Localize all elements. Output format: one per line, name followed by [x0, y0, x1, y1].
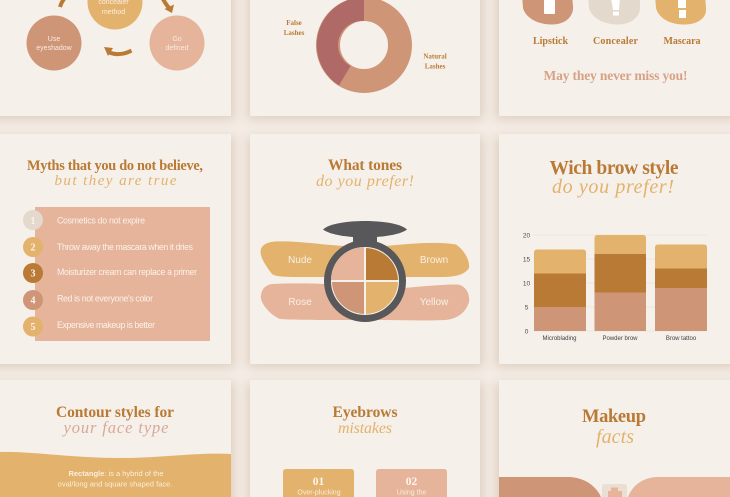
heading: What tones: [328, 157, 402, 174]
number markers: 3: [30, 268, 36, 280]
description: oval/long and square shaped face.: [58, 480, 172, 488]
step circle: use eyeshadow: [26, 16, 82, 70]
number markers: 2: [30, 242, 36, 254]
right shape: [628, 477, 730, 497]
tone labels: Brown: [420, 255, 448, 266]
stacked bar chart: 5: [525, 304, 529, 312]
stacked bar chart: Microblading: [542, 336, 577, 342]
number markers: 1: [30, 216, 36, 227]
myth list: Expensive makeup is better: [57, 320, 155, 330]
stacked bar chart: 15: [523, 256, 530, 264]
icon: mascara: [655, 0, 706, 24]
product labels: Lipstick: [533, 36, 568, 47]
script subheading: but they are true: [54, 173, 177, 189]
card 02: [376, 469, 447, 497]
myth list: Throw away the mascara when it dries: [57, 242, 194, 252]
myth list: Cosmetics do not expire: [57, 216, 145, 226]
script subheading: mistakes: [338, 420, 392, 437]
bar: brow tattoo: [655, 244, 707, 331]
stacked bar chart: 20: [523, 232, 530, 240]
bar: powder brow: [594, 235, 646, 331]
panel: brow style chart: [499, 134, 730, 364]
step circle: use eyeshadow: eyeshadow: [36, 45, 73, 52]
list background: [35, 207, 210, 341]
description: [58, 469, 172, 488]
script subheading: do you prefer!: [552, 176, 674, 198]
stacked bar chart: 10: [523, 280, 530, 288]
swatch: yellow band: [261, 241, 469, 277]
donut chart: [317, 0, 400, 86]
swatch: pink band: [261, 283, 469, 320]
step circle: go defined: Go: [172, 36, 182, 43]
heading: Contour styles for: [56, 404, 174, 421]
tone labels: Rose: [288, 297, 312, 308]
card 01: 01: [313, 476, 324, 488]
stacked bar chart: Brow tattoo: [666, 336, 697, 342]
heading: Makeup: [582, 407, 646, 427]
myth list: [57, 216, 197, 330]
heading: Myths that you do not believe,: [27, 158, 203, 174]
card 01: Over-plucking: [297, 490, 341, 496]
step circle: use eyeshadow: Use: [48, 36, 60, 43]
number markers: 4: [30, 296, 36, 306]
heading: Eyebrows: [332, 404, 398, 421]
icon: lipstick: [522, 0, 573, 24]
label: natural lashes: Natural: [423, 52, 447, 60]
script subheading: do you prefer!: [316, 173, 414, 190]
label: natural lashes: Lashes: [425, 62, 446, 70]
wave background: [0, 452, 231, 497]
heading: Wich brow style: [550, 158, 679, 179]
arrow: left stub: [60, 0, 64, 7]
card 01: [283, 469, 354, 497]
number markers: 5: [30, 322, 36, 333]
description: Rectangle: is a hybrid of the: [68, 469, 164, 478]
icon: bottle: [602, 484, 627, 497]
icon: compact: [323, 221, 407, 318]
panel: eyebrow mistakes: [250, 380, 480, 497]
bar: microblading: [534, 250, 586, 331]
script subheading: facts: [596, 426, 634, 448]
tone labels: Yellow: [420, 297, 449, 308]
step circle: concealer method: [88, 0, 142, 30]
panel: tones compact: [250, 134, 480, 364]
closing line: May they never miss you!: [544, 68, 688, 83]
product labels: Concealer: [593, 36, 639, 47]
script subheading: your face type: [62, 418, 168, 437]
panel: must-have products: [499, 0, 730, 116]
arrow: top right: [163, 0, 174, 13]
step circle: go defined: [150, 16, 204, 70]
panel: contour styles: [0, 380, 231, 497]
tone labels: [288, 255, 449, 308]
stacked bar chart: [523, 232, 707, 342]
tone labels: Nude: [288, 255, 312, 266]
icon: concealer: [588, 0, 640, 24]
panel: myths: [0, 134, 231, 364]
stacked bar chart: Powder brow: [602, 336, 638, 342]
product labels: Mascara: [664, 36, 700, 47]
stacked bar chart: 0: [525, 328, 529, 336]
label: false lashes: False: [286, 19, 302, 27]
myth list: Red is not everyone's color: [57, 294, 153, 304]
left shape: [499, 477, 601, 497]
label: false lashes: Lashes: [284, 29, 305, 37]
card 02: Using the: [397, 490, 426, 496]
step circle: go defined: defined: [166, 45, 189, 52]
step circle: concealer method: method: [102, 9, 125, 16]
product labels: [533, 36, 700, 47]
card 02: 02: [406, 476, 418, 488]
arrow: bottom: [104, 47, 132, 56]
number markers: [23, 210, 43, 336]
myth list: Moisturizer cream can replace a primer: [57, 267, 197, 277]
panel: lashes donut chart: [250, 0, 480, 116]
label: natural lashes: [423, 52, 447, 70]
panel: concealer steps cycle: [0, 0, 231, 116]
label: false lashes: [284, 19, 305, 37]
panel: makeup facts: [499, 380, 730, 497]
